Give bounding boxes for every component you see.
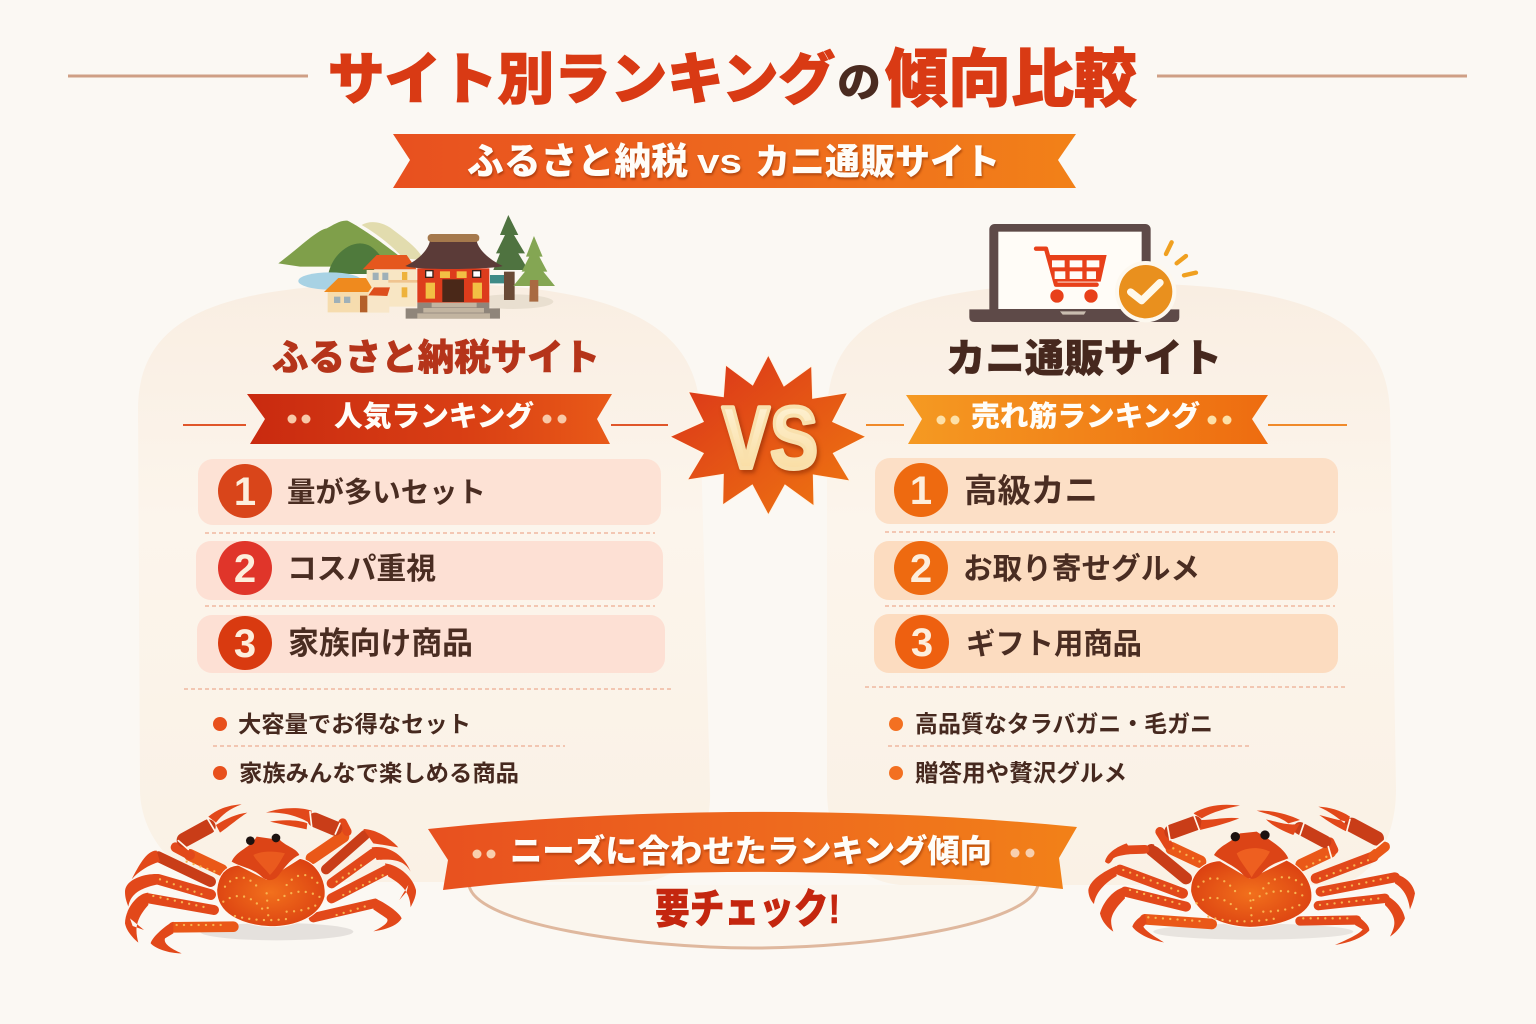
panel heading: ふるさと納税サイト [272, 337, 600, 378]
shrine [417, 268, 489, 303]
title: の [837, 59, 881, 106]
bullet list: 家族みんなで楽しめる商品 [239, 760, 519, 786]
panel heading: カニ通販サイト [946, 338, 1222, 381]
lower house [328, 292, 368, 312]
rank 2: 2 [910, 547, 932, 591]
rank 3: ギフト用商品 [966, 628, 1142, 661]
panel: furusato nozei [138, 215, 710, 882]
VS starburst [670, 355, 866, 515]
callout: bottom banner: 要チェック! [655, 886, 840, 932]
ribbon: best sellers [866, 395, 1347, 444]
bullet list: 大容量でお得なセット [238, 711, 471, 737]
rank 3 [874, 614, 1338, 673]
bullet list [213, 711, 519, 786]
rank 3: 家族向け商品 [288, 626, 473, 661]
illustration: village with shrine [278, 215, 555, 319]
subtitle banner: vs [697, 143, 742, 181]
rank 1 [198, 459, 661, 525]
illustration: laptop with cart [969, 224, 1196, 322]
rank 2: 2 [234, 547, 256, 591]
ribbon: popular ranking [183, 394, 668, 444]
rank 3: 3 [234, 622, 256, 666]
panel: crab mail order [827, 224, 1396, 885]
crab: right [1088, 805, 1415, 945]
rank 2: お取り寄せグルメ [963, 553, 1200, 586]
rank 3: 3 [911, 621, 933, 665]
upper house [367, 270, 417, 307]
rank 1: 1 [910, 469, 932, 513]
title [68, 45, 1467, 115]
ribbon: best sellers: 売れ筋ランキング [971, 400, 1200, 433]
bullet list: 高品質なタラバガニ・毛ガニ [915, 711, 1213, 737]
bullet list: 贈答用や贅沢グルメ [915, 759, 1127, 786]
rank 2: コスパ重視 [287, 553, 436, 586]
bullet list [889, 711, 1213, 786]
title: 傾向比較 [885, 45, 1137, 115]
subtitle banner: カニ通販サイト [755, 141, 1000, 182]
rank 2 [874, 541, 1338, 600]
rank 2 [196, 541, 663, 600]
rank 1 [875, 458, 1338, 524]
callout: bottom banner: ニーズに合わせたランキング傾向 [510, 833, 992, 869]
subtitle banner [393, 134, 1076, 188]
title: サイト別ランキング [328, 48, 835, 111]
VS starburst: VS [722, 388, 818, 487]
rank 1: 1 [234, 470, 256, 514]
callout: bottom banner [428, 812, 1077, 948]
ribbon: popular ranking: 人気ランキング [334, 400, 534, 433]
crab: left [125, 804, 416, 953]
rank 1: 量が多いセット [287, 476, 486, 509]
rank 1: 高級カニ [964, 472, 1098, 509]
rank 3 [197, 615, 665, 673]
subtitle banner: ふるさと納税 [467, 141, 688, 182]
